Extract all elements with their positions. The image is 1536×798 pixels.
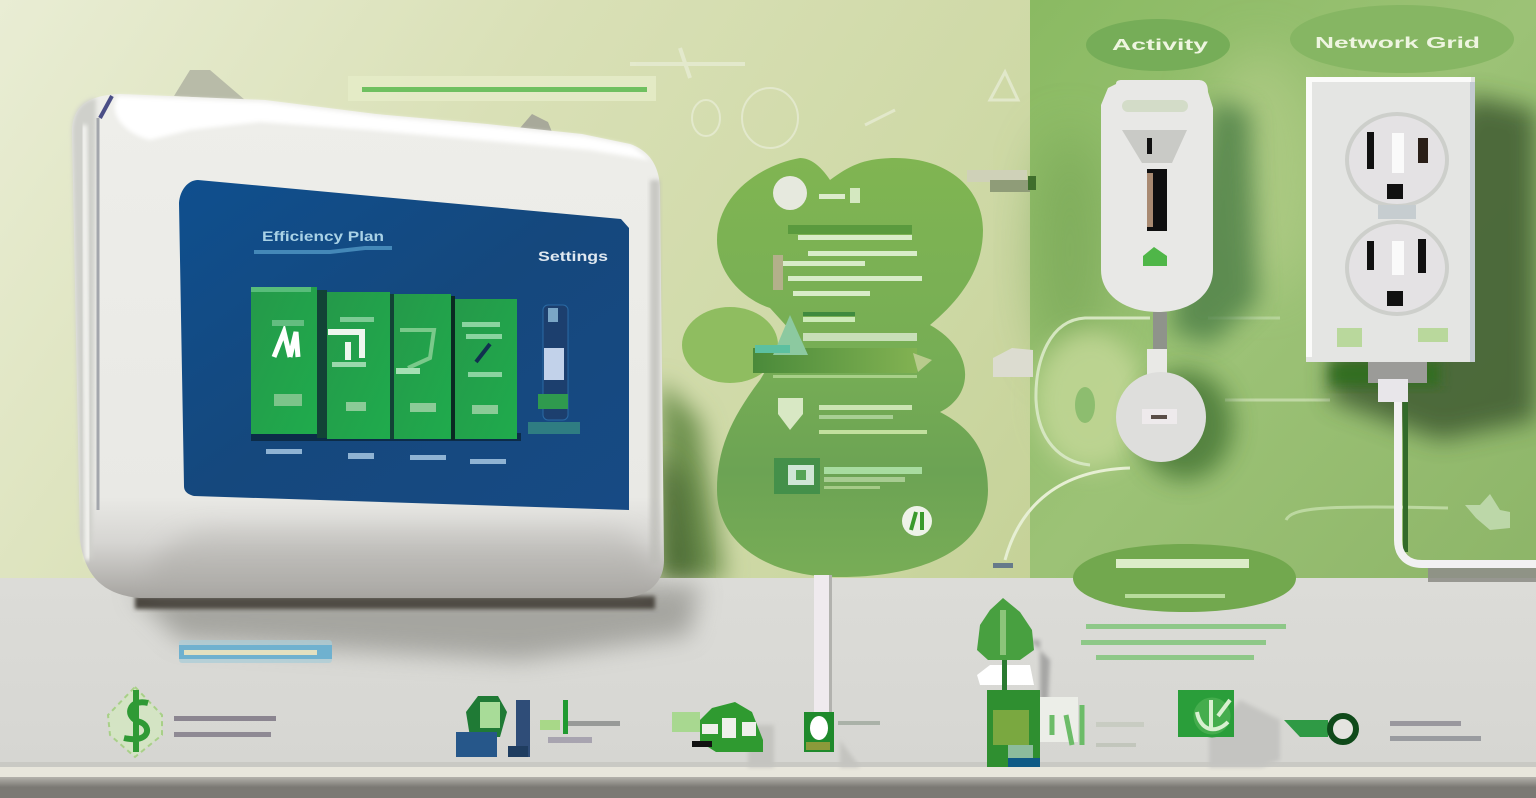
shelf (0, 578, 1536, 798)
side tag (1040, 697, 1082, 745)
lower socket (1347, 222, 1447, 314)
green card 2 (327, 292, 390, 439)
connector lines (1005, 318, 1448, 560)
side meter (528, 305, 580, 434)
smart plug (1101, 80, 1258, 350)
top right label A: Activity (1112, 37, 1208, 54)
faint wall icons (630, 48, 1018, 148)
caption lines (1081, 624, 1286, 660)
green card 3 (394, 294, 451, 439)
left side strip (72, 98, 96, 560)
oval caption (1073, 544, 1296, 612)
faint leaf (1075, 387, 1095, 423)
bottom icon: plant (977, 598, 1144, 767)
wall outlet (1306, 77, 1536, 582)
top right label B (1290, 5, 1514, 73)
row 2 (753, 312, 932, 378)
background wall (0, 0, 1536, 580)
top banner (348, 76, 656, 101)
bottom icon: green car (672, 702, 774, 767)
thermometer (804, 575, 880, 767)
green card 4 (455, 299, 517, 439)
device body (72, 94, 664, 598)
wall side marks (967, 170, 1036, 568)
top highlight (115, 96, 650, 160)
card shadows (251, 433, 521, 441)
screen (179, 180, 629, 510)
badge icon (902, 506, 932, 536)
row 4 (774, 458, 932, 536)
upper socket (1347, 114, 1447, 206)
cloud halo (682, 307, 778, 383)
card captions (266, 449, 506, 464)
row 1 (773, 176, 922, 296)
bottom icon: dollar (108, 687, 276, 757)
bottom icon: badge (1178, 690, 1280, 767)
row 3 (778, 398, 927, 434)
cord icon (1465, 494, 1510, 530)
green info cloud (682, 158, 988, 577)
round sensor (1116, 349, 1233, 480)
plug cord (1428, 563, 1536, 582)
screen label: Settings (538, 248, 608, 264)
small blue caption (179, 640, 332, 663)
bottom icon: chart (456, 696, 620, 757)
green card 1 (251, 287, 317, 434)
bottom icon: meter (1284, 716, 1481, 742)
top right label B: Network Grid (1315, 35, 1480, 52)
top right label A (1086, 19, 1230, 71)
thermostat device (72, 70, 700, 660)
top knobs (174, 70, 245, 100)
device shadow (130, 585, 700, 660)
screen title: Efficiency Plan (262, 228, 384, 244)
